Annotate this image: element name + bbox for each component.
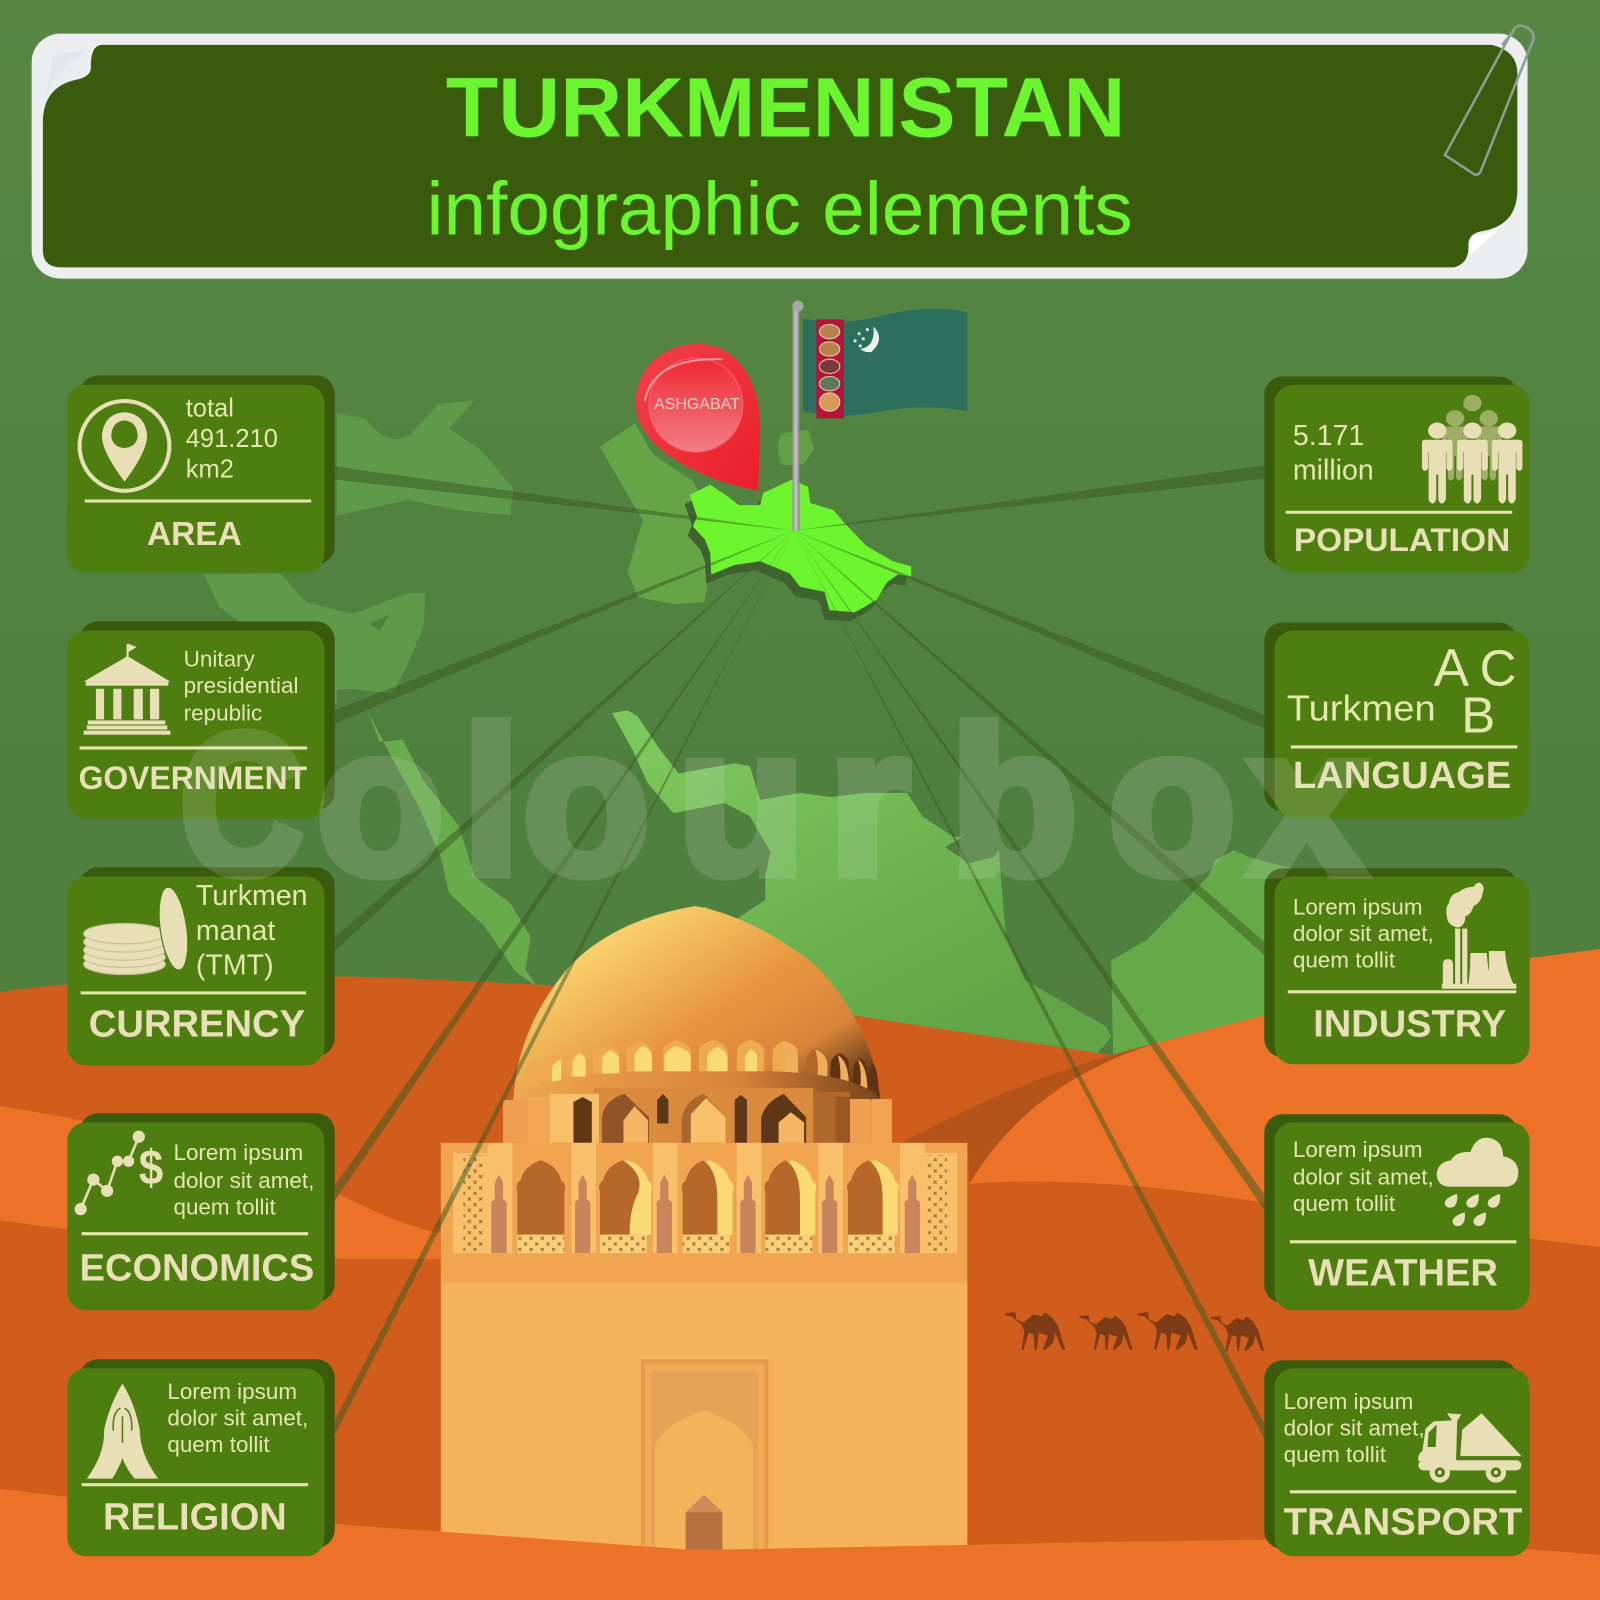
- frieze: [441, 1143, 967, 1284]
- icon: people: [1422, 395, 1522, 504]
- subtitle: infographic elements: [427, 168, 1133, 252]
- flag carpet stripe: [816, 319, 844, 418]
- text: transport body: [1284, 1389, 1425, 1467]
- building: mausoleum: [441, 906, 967, 1554]
- panel: weather: [1264, 1114, 1530, 1310]
- country map: Turkmenistan: [685, 480, 911, 621]
- text: religion body: dolor sit amet,: [167, 1406, 308, 1431]
- heading: economics: ECONOMICS: [80, 1247, 314, 1289]
- text: currency value: manat: [196, 915, 275, 947]
- icon: factory: [1442, 883, 1516, 989]
- text: economics body: dolor sit amet,: [173, 1168, 314, 1193]
- heading: weather: WEATHER: [1308, 1252, 1498, 1294]
- text: industry body: Lorem ipsum: [1293, 894, 1423, 919]
- panel: government: [67, 621, 335, 818]
- text: government value: presidential: [184, 673, 298, 698]
- flag: [792, 301, 967, 531]
- heading: language: LANGUAGE: [1293, 754, 1511, 796]
- icon: location pin: [80, 401, 169, 491]
- crescent and stars: [854, 327, 879, 352]
- lower drum: [503, 1088, 892, 1143]
- building body: [441, 1283, 967, 1553]
- text: transport body: dolor sit amet,: [1284, 1416, 1425, 1441]
- icon: letters: B: [1461, 687, 1495, 744]
- text: area value: [186, 394, 278, 484]
- icon: dump truck: [1418, 1413, 1521, 1483]
- text: currency value: [196, 880, 308, 981]
- connector lines: [335, 465, 1265, 1441]
- watermark: C: [180, 692, 303, 916]
- panel: language: [1264, 622, 1530, 818]
- panel: industry: [1264, 868, 1530, 1064]
- text: population value: 5.171: [1293, 420, 1364, 452]
- text: religion body: [167, 1379, 308, 1457]
- watermark: olourbox: [316, 685, 1365, 918]
- text: population value: [1293, 420, 1374, 487]
- heading: religion: RELIGION: [103, 1496, 287, 1538]
- text: weather body: dolor sit amet,: [1293, 1165, 1434, 1190]
- icon: rain cloud: [1437, 1138, 1518, 1226]
- text: government value: Unitary: [184, 646, 256, 671]
- text: weather body: quem tollit: [1293, 1191, 1396, 1216]
- text: area value: km2: [186, 456, 234, 484]
- text: economics body: quem tollit: [173, 1194, 276, 1219]
- text: currency value: Turkmen: [196, 880, 308, 912]
- text: transport body: quem tollit: [1284, 1442, 1387, 1467]
- panel: area: [67, 376, 335, 572]
- portal: [641, 1359, 768, 1554]
- heading: transport: TRANSPORT: [1284, 1501, 1522, 1543]
- icon: economics chart: $: [139, 1142, 163, 1196]
- panel: population: [1264, 377, 1530, 572]
- text: weather body: Lorem ipsum: [1293, 1137, 1423, 1162]
- side lattices: [463, 1155, 947, 1251]
- dome arches: [527, 1040, 879, 1092]
- flag pole: [792, 308, 799, 531]
- desert dunes: [0, 949, 1600, 1600]
- panel: religion: [67, 1359, 335, 1556]
- arches: [491, 1160, 920, 1253]
- panel: economics: [67, 1113, 335, 1310]
- world map: [204, 400, 1327, 1061]
- icon: government building: [84, 644, 170, 735]
- foreground dune: [0, 1489, 1600, 1600]
- header banner: [32, 26, 1534, 279]
- heading: government: GOVERNMENT: [79, 759, 307, 796]
- camel caravan: [1005, 1312, 1264, 1351]
- panel: transport: [1264, 1360, 1530, 1556]
- heading: population: POPULATION: [1294, 521, 1510, 558]
- icon: coins: [84, 885, 192, 974]
- text: area value: 491.210: [186, 425, 278, 453]
- dome: [513, 906, 881, 1102]
- text: industry body: [1293, 894, 1434, 972]
- title: TURKMENISTAN: [446, 60, 1126, 155]
- text: transport body: Lorem ipsum: [1284, 1389, 1413, 1414]
- text: language value: Turkmen: [1287, 688, 1436, 728]
- location pin: Ashgabat: [636, 344, 760, 491]
- icon: letters: A: [1434, 639, 1470, 698]
- panel: currency: [67, 867, 335, 1065]
- text: government value: [184, 646, 298, 725]
- location pin: Ashgabat: ASHGABAT: [654, 396, 740, 413]
- text: area value: total: [186, 394, 234, 422]
- text: industry body: dolor sit amet,: [1293, 921, 1434, 946]
- text: currency value: (TMT): [196, 949, 274, 981]
- text: industry body: quem tollit: [1293, 947, 1396, 972]
- text: government value: republic: [184, 700, 262, 725]
- icon: letters: C: [1480, 640, 1516, 697]
- heading: area: AREA: [147, 516, 242, 553]
- icon: letters: [1434, 639, 1516, 744]
- heading: currency: CURRENCY: [89, 1003, 305, 1045]
- text: economics body: Lorem ipsum: [173, 1140, 303, 1165]
- text: religion body: quem tollit: [167, 1432, 270, 1457]
- text: religion body: Lorem ipsum: [167, 1379, 297, 1404]
- text: economics body: [173, 1140, 314, 1219]
- icon: paper clip: [1445, 26, 1534, 175]
- text: population value: million: [1293, 455, 1374, 487]
- icon: praying hands: [87, 1384, 158, 1479]
- heading: industry: INDUSTRY: [1313, 1003, 1506, 1045]
- drum band: [513, 1071, 881, 1104]
- icon: economics chart: [74, 1131, 163, 1215]
- text: weather body: [1293, 1137, 1434, 1216]
